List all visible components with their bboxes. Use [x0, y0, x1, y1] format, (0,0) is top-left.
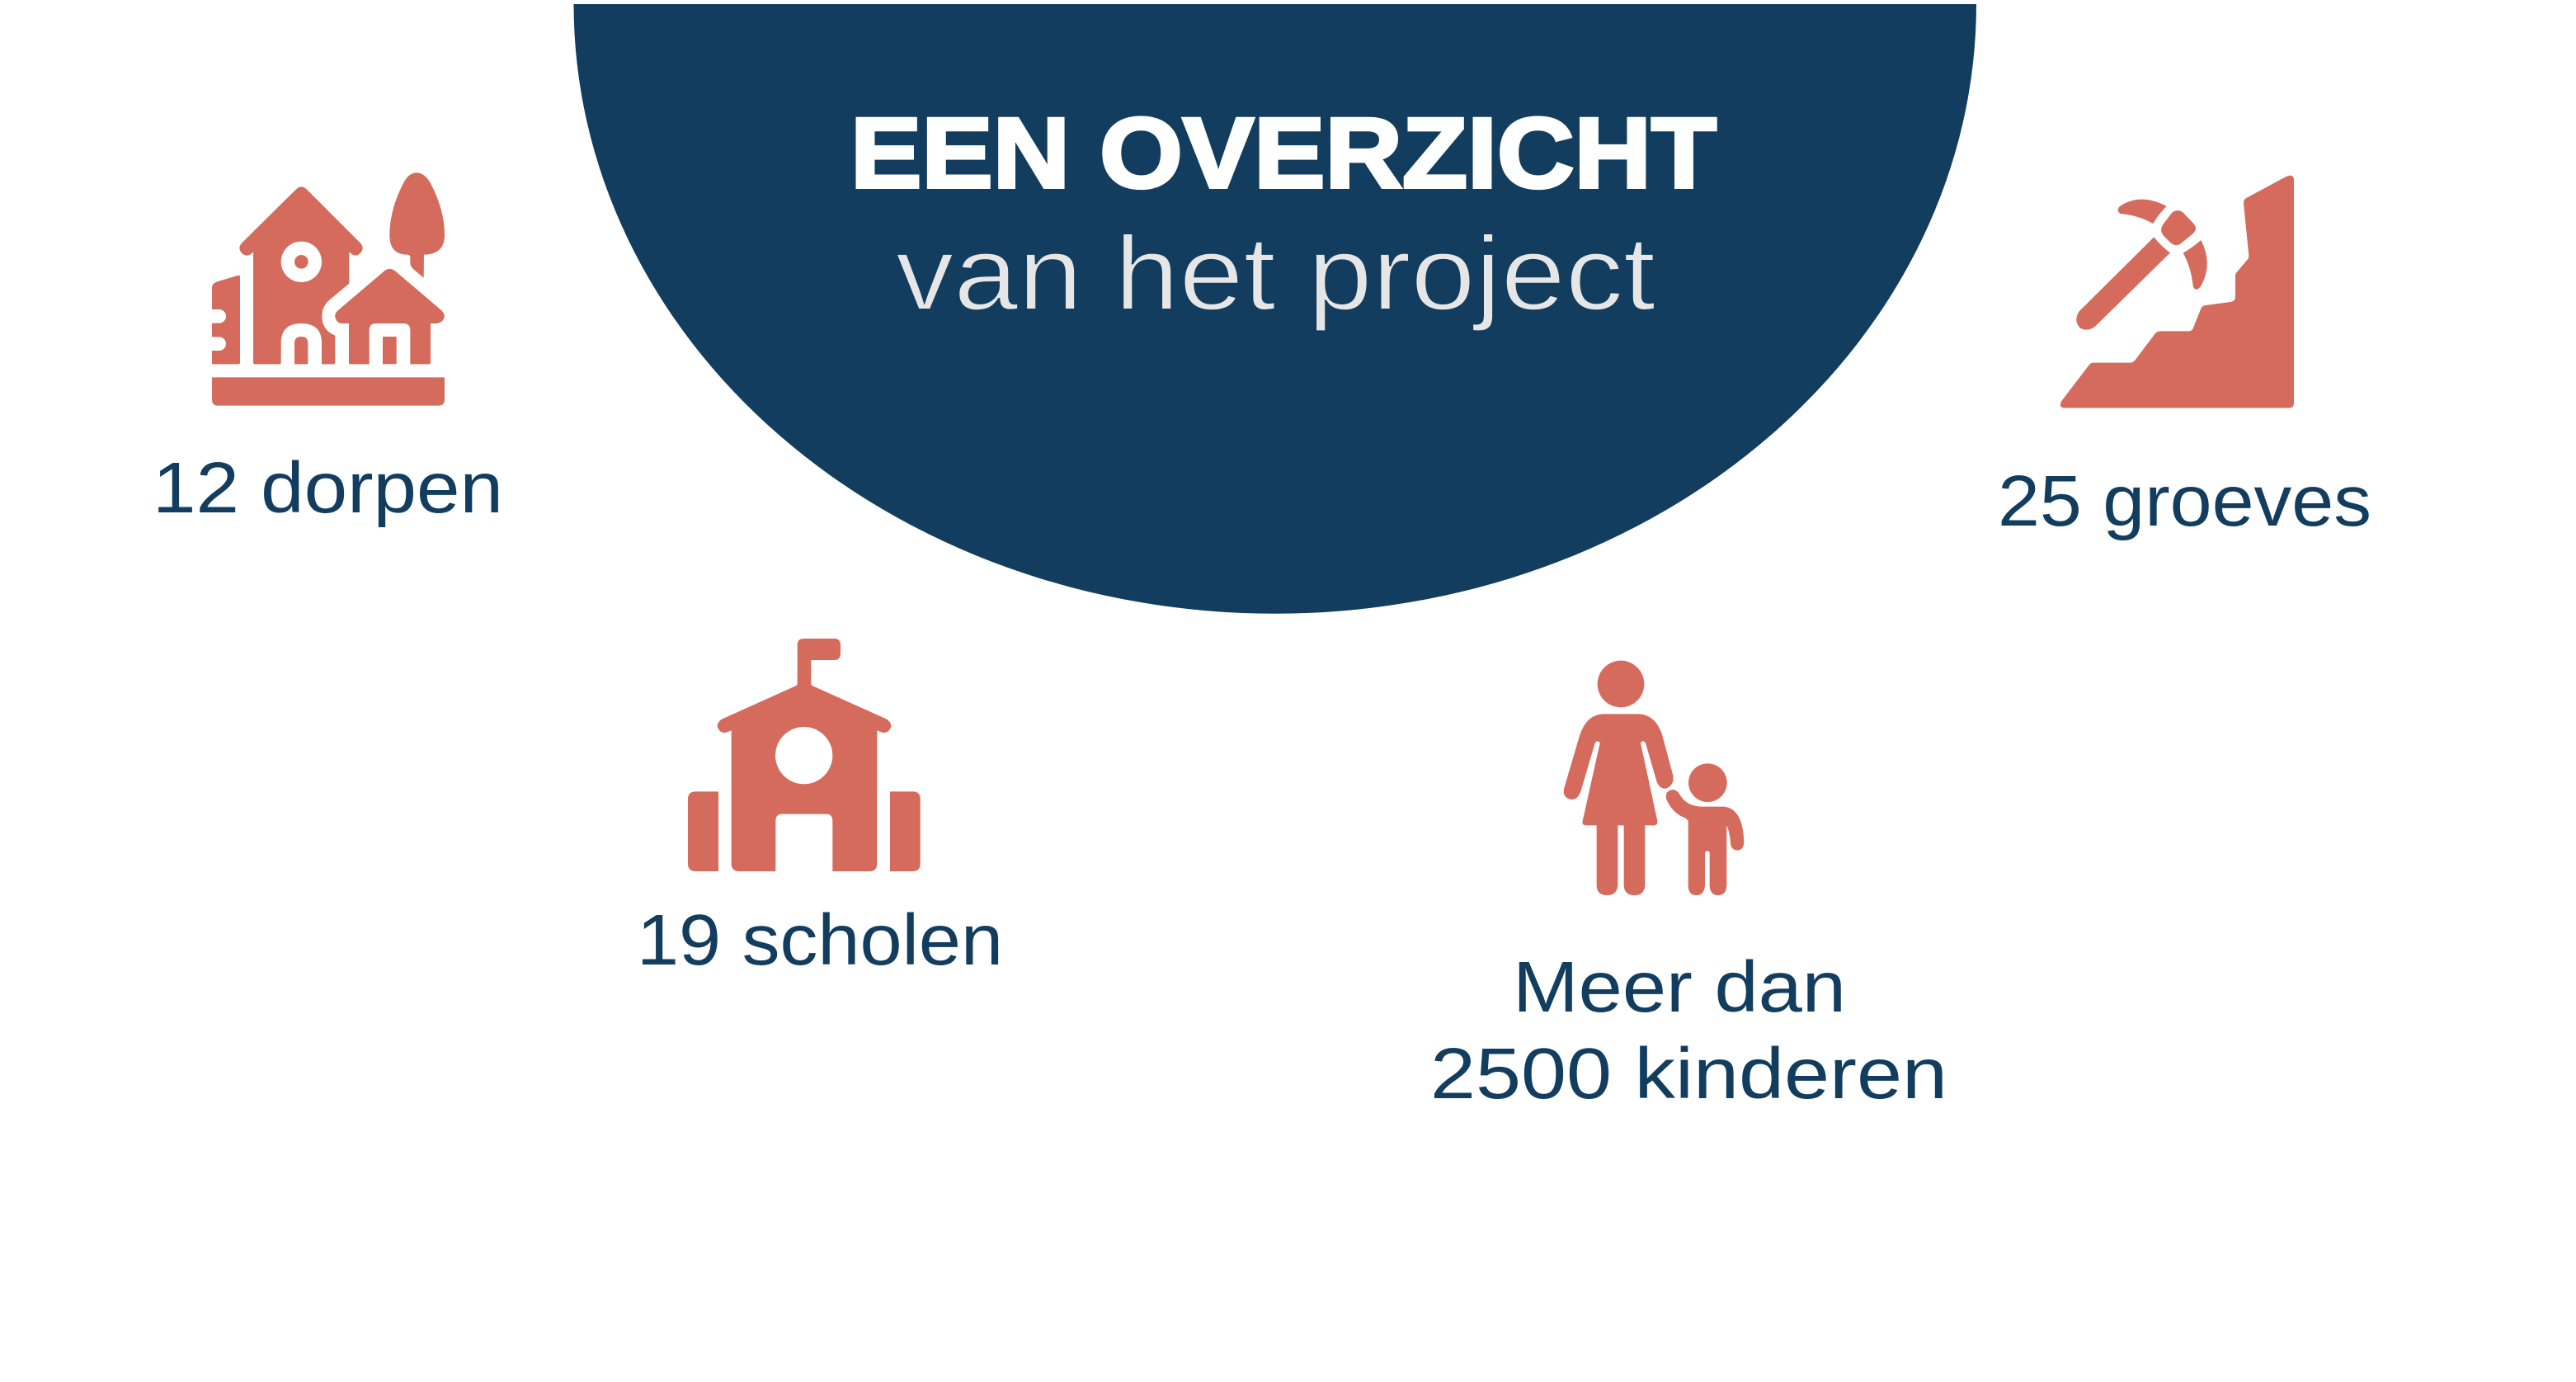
icon: mother and child [1564, 661, 1744, 895]
label: 12 dorpen: 12 dorpen [153, 448, 503, 528]
header panel: navy half ellipse [574, 4, 1976, 614]
label: Meer dan 2500 kinderen: 2500 kinderen [1430, 1034, 1947, 1114]
icon: pickaxe and quarry slope [2060, 176, 2294, 408]
stat: 12 dorpen [153, 172, 503, 528]
subtitle: van het project: van het project [896, 215, 1655, 332]
title: EEN OVERZICHT: EEN OVERZICHT [850, 97, 1717, 209]
stat: 25 groeves [1998, 176, 2371, 541]
label: Meer dan 2500 kinderen [1430, 947, 1947, 1114]
label: Meer dan 2500 kinderen: Meer dan [1513, 947, 1846, 1027]
icon: school building with flag [688, 639, 921, 871]
label: 25 groeves: 25 groeves [1998, 461, 2371, 541]
label: 19 scholen: 19 scholen [637, 900, 1003, 980]
stat: 19 scholen [637, 639, 1003, 980]
icon: village with houses and tree [212, 172, 445, 406]
stat: meer dan 2500 kinderen [1430, 661, 1947, 1114]
